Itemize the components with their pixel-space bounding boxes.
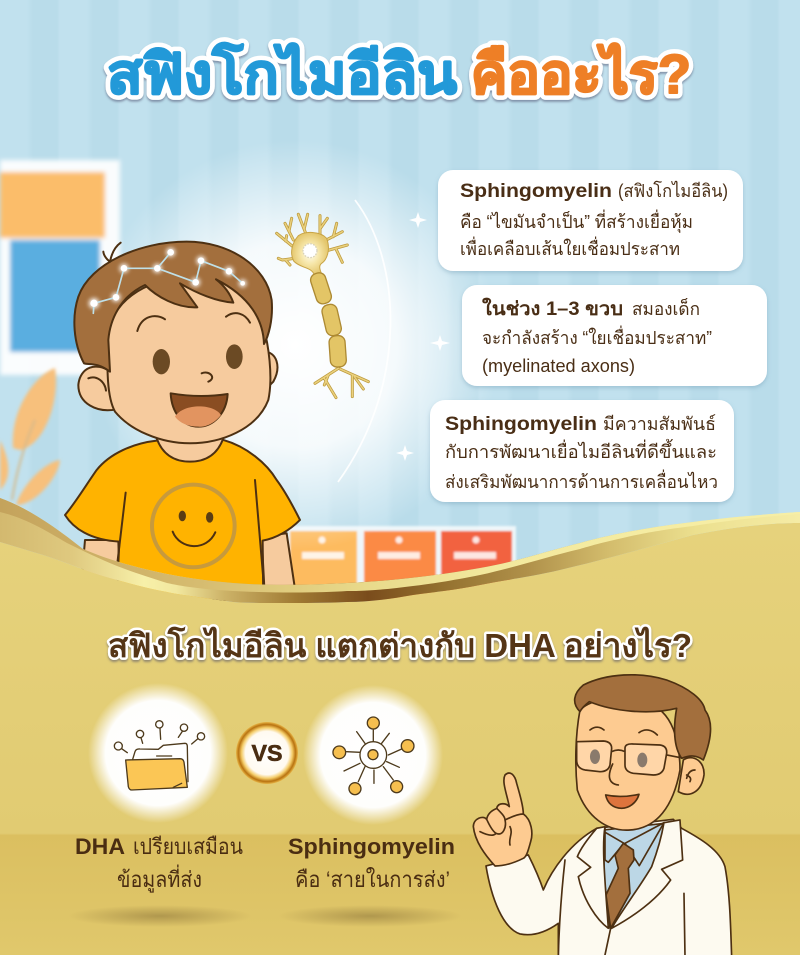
DHA caption: [75, 834, 243, 893]
shirt smiley: [152, 485, 235, 567]
Sphingomyelin caption: คือ ‘สายในการส่ง’: [295, 867, 450, 892]
panel 3: relationship: ส่งเสริมพัฒนาการด้านการเคลื่อนไหว: [445, 469, 718, 492]
sparkles: [396, 212, 450, 461]
DHA caption: เปรียบเสมือน: [133, 834, 243, 859]
doctor glasses: [577, 741, 681, 775]
boy hair: [74, 242, 272, 372]
ribbon highlight band: [0, 498, 800, 592]
Sphingomyelin caption: Sphingomyelin: [288, 834, 455, 859]
brain network glow: [89, 248, 247, 309]
DHA caption: DHA: [75, 834, 125, 859]
panel 1: definition: เพื่อเคลือบเส้นใยเชื่อมประสาท: [460, 236, 680, 259]
Sphingomyelin icon circle: network: [303, 685, 443, 825]
doctor features: [590, 727, 695, 785]
DHA caption: ข้อมูลที่ส่ง: [117, 864, 202, 893]
boy character: [65, 242, 300, 600]
versus badge: [236, 722, 298, 784]
panel 3: relationship: กับการพัฒนาเยื่อไมอีลินที่ดีขึ้นและ: [445, 439, 717, 462]
brain network nodes: [90, 249, 245, 307]
panel 3: relationship: Sphingomyelin: [445, 414, 597, 435]
main title: สฟิงโกไมอีลิน: [107, 42, 457, 105]
doctor lapels: [577, 827, 608, 928]
panel 1: definition: [438, 170, 743, 271]
doctor hair: [575, 675, 711, 760]
boy mouth: [171, 393, 228, 427]
main title: คืออะไร?: [471, 42, 691, 105]
versus badge: VS: [252, 740, 282, 766]
doctor hand: [473, 773, 532, 866]
main title: สฟิงโกไมอีลิน: [107, 42, 457, 105]
golden wave and lower panel background: [0, 498, 800, 955]
doctor tie: [606, 843, 634, 928]
boy face: [107, 277, 270, 443]
panel 1: definition: (สฟิงโกไมอีลิน): [618, 180, 728, 201]
blurred window: [0, 160, 120, 375]
boy arms: [80, 533, 297, 600]
white glow behind neuron: [90, 140, 500, 550]
gold ribbon: [0, 498, 800, 603]
boy ears: [78, 367, 117, 410]
boy eyes and brows: [88, 313, 250, 391]
brain network lines: [93, 252, 243, 313]
doctor face: [576, 699, 680, 830]
DHA icon circle: folder: [88, 683, 228, 823]
doctor collar: [598, 823, 664, 866]
Sphingomyelin caption: [288, 834, 455, 892]
panel 3: relationship: มีความสัมพันธ์: [603, 414, 716, 434]
panel 2: ages 1-3: (myelinated axons): [482, 356, 635, 376]
doctor mouth: [606, 794, 639, 808]
panel 2: ages 1-3: สมองเด็ก: [632, 297, 700, 319]
neuron illustration: [277, 214, 368, 398]
doctor shirt: [604, 823, 665, 928]
section heading: สฟิงโกไมอีลิน แตกต่างกับ DHA อย่างไร?: [108, 626, 692, 664]
panel 1: definition: Sphingomyelin: [460, 181, 612, 202]
panel 3: relationship: [430, 400, 734, 502]
main title: คืออะไร?: [471, 42, 691, 105]
glowing arc: [338, 200, 390, 482]
doctor ear: [678, 758, 704, 794]
panel 2: ages 1-3: [462, 285, 767, 386]
panel 2: ages 1-3: ในช่วง 1–3 ขวบ: [482, 297, 623, 320]
background: striped blue wall: [0, 0, 800, 620]
caption shadows: [68, 905, 462, 927]
blurred plant leaves: [0, 368, 60, 505]
panel 2: ages 1-3: จะกำลังสร้าง “ใยเชื่อมประสาท”: [482, 325, 712, 348]
panel 1: definition: คือ “ไขมันจำเป็น” ที่สร้างเยื่อหุ้ม: [460, 209, 693, 233]
doctor coat: [486, 819, 732, 955]
blurred orange boxes: [288, 526, 516, 600]
doctor character: [473, 675, 732, 955]
boy neck: [157, 438, 223, 462]
boy t-shirt: [65, 440, 300, 600]
main title: [107, 42, 691, 105]
